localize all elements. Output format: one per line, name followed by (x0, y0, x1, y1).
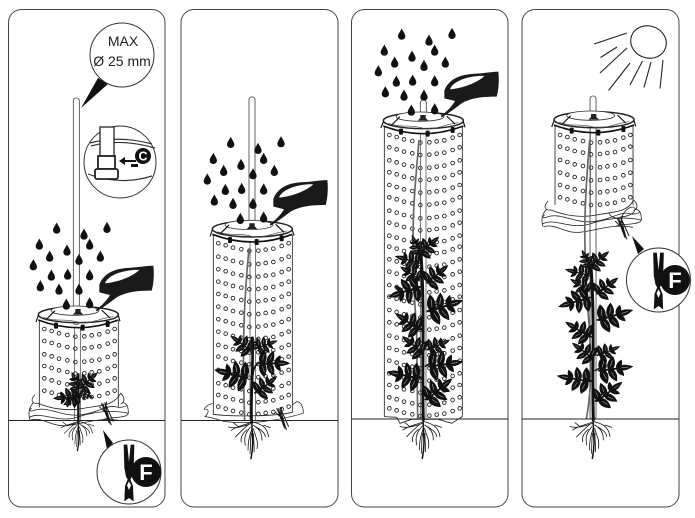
panel 3 holes (387, 133, 461, 418)
panel 1 frame (8, 10, 165, 507)
panel 2 netting cylinder (213, 235, 292, 416)
panel 1 holes (42, 327, 116, 400)
panel 3 pole inside cylinder (420, 133, 426, 419)
panel 1 rim (36, 306, 120, 331)
panel 2 ground line (181, 420, 338, 422)
panel 4 netting cylinder (555, 125, 633, 205)
panel 3 rain and watering can (375, 28, 499, 117)
panel 1 rain and watering can (30, 222, 154, 311)
callout: collar detail C (84, 126, 156, 198)
panel 2 small clip (275, 407, 289, 430)
panel 4 pole inside cylinder (590, 133, 596, 213)
panel 3: tall plant fully inside netting (352, 10, 508, 507)
panel 2 tie line (243, 248, 249, 420)
panel 3 netting cylinder (384, 127, 462, 423)
panel 3 tie line (413, 140, 419, 419)
panel 2 frame (181, 10, 338, 507)
panel 1 pole (73, 98, 79, 325)
panel 1 gathered cloth (29, 393, 128, 426)
panel 4 pole (590, 96, 596, 419)
callout: clip F, panel 1: F (139, 460, 153, 485)
panel 3 rim (381, 112, 465, 137)
icon: sun with rays (594, 21, 671, 90)
panel 1 artwork (29, 98, 154, 451)
panel 4 frame (522, 10, 679, 507)
panel 2 plant (210, 327, 290, 423)
panel 2 roots (229, 419, 270, 459)
callout: clip F, panel 4: F (668, 268, 682, 293)
panel 2 rim (210, 220, 294, 245)
panel 3 ground line (352, 418, 508, 420)
panel 4 bow (609, 207, 635, 218)
callout: collar detail C: C (138, 150, 148, 164)
panel 4 ground line (522, 418, 679, 420)
panel 4 artwork (542, 96, 641, 458)
panel 2 pole (249, 97, 255, 230)
panel 2 rain and watering can (204, 136, 328, 226)
panel 3 artwork (375, 28, 499, 458)
callout: clip F, panel 1 (97, 430, 161, 504)
panel 1 seedling (52, 365, 105, 423)
panel 4 tie line (585, 140, 590, 419)
panel 3 plant (384, 228, 468, 421)
panel 3 frame (352, 10, 508, 507)
panel 1 ground line (8, 420, 165, 422)
panel 2 cloth (204, 402, 303, 423)
callout: clip F, panel 4 (626, 236, 690, 312)
callout: maximum diameter: MAX (108, 33, 139, 49)
panel 3 roots (400, 418, 442, 458)
panel 1 pole inside cylinder (75, 327, 80, 420)
panel 1 small clip (99, 402, 113, 425)
panel 2 holes (216, 241, 290, 416)
panel 4 roots (570, 418, 612, 458)
panel 2 pole inside cylinder (250, 242, 256, 420)
panel 1 netting cylinder (39, 321, 118, 407)
panel 2: plant growing (181, 10, 338, 507)
panel 4 holes (558, 133, 632, 207)
panel 4: netting raised, plant in the sun (522, 10, 690, 507)
panel 1 roots (58, 419, 94, 451)
panel 1: young plant with watering (8, 10, 165, 507)
panel 4 plant (554, 244, 638, 421)
panel 2 artwork (204, 97, 328, 459)
panel 4 clip (615, 216, 629, 239)
panel 3 pole (420, 100, 426, 127)
panel 4 gathered cloth (542, 200, 641, 232)
panel 4 rim (552, 111, 636, 136)
callout: maximum diameter: Ø 25 mm (93, 53, 151, 69)
callout: maximum diameter (81, 23, 154, 108)
